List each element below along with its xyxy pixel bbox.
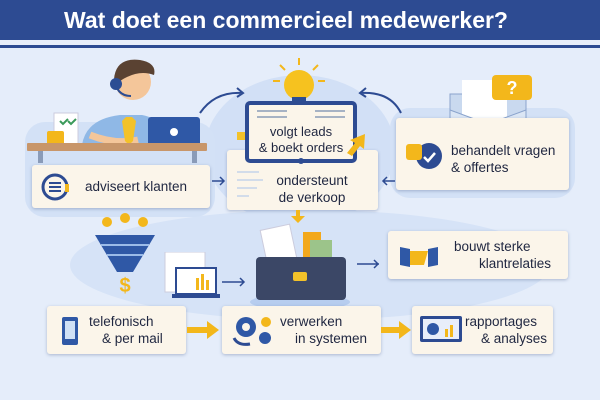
box: rapportages & analyses: [412, 306, 553, 354]
box: adviseert klanten: [32, 165, 210, 208]
box: behandelt vragen: & offertes: [451, 160, 509, 175]
icon: dashboard: [420, 316, 462, 342]
box: ondersteunt de verkoop: de verkoop: [279, 190, 345, 205]
box: ondersteunt de verkoop: [227, 150, 378, 210]
box: bouwt sterke klantrelaties: [388, 231, 568, 279]
box: behandelt vragen: [396, 118, 569, 190]
box: rapportages & analyses: & analyses: [481, 331, 547, 346]
box: verwerken in systemen: verwerken: [280, 314, 342, 329]
title: Wat doet een commercieel medewerker?: [64, 7, 508, 33]
illustration: briefcase: [250, 224, 350, 306]
box: verwerken in systemen: [222, 306, 381, 354]
box: telefonisch & per mail: & per mail: [102, 331, 163, 346]
illustration: funnel: [95, 213, 155, 295]
box: ondersteunt de verkoop: ondersteunt: [276, 173, 348, 188]
box: verwerken in systemen: in systemen: [295, 331, 367, 346]
illustration: envelope: ?: [506, 78, 518, 98]
box: telefonisch & per mail: telefonisch: [89, 314, 154, 329]
arrow: [381, 321, 411, 339]
arrow: [187, 321, 219, 339]
box: bouwt sterke klantrelaties: bouwt sterke: [454, 239, 531, 254]
box: rapportages & analyses: rapportages: [465, 314, 537, 329]
icon: headset: [42, 174, 69, 200]
illustration: man at desk: [27, 60, 207, 163]
arrow to bouwt: [357, 260, 379, 268]
box: behandelt vragen: behandelt vragen: [451, 143, 555, 158]
icon: gears: [232, 317, 271, 346]
illustration: envelope: [450, 75, 532, 118]
arrows mid: [212, 176, 395, 223]
illustration: bulb and book with text: volgt leads: [270, 124, 333, 139]
box: telefonisch & per mail: [47, 306, 186, 354]
title bar: [0, 0, 600, 48]
illustration: bulb and book with text: [237, 58, 365, 164]
arrows top: [199, 87, 402, 114]
icon: phone: [62, 317, 78, 345]
box: bouwt sterke klantrelaties: klantrelaties: [479, 256, 551, 271]
illustration: laptop with docs: [164, 252, 245, 298]
icon: chat: [406, 143, 442, 169]
icon: handshake: [400, 247, 438, 267]
illustration: bulb and book with text: & boekt orders: [259, 140, 344, 155]
box: adviseert klanten: adviseert klanten: [85, 179, 187, 194]
